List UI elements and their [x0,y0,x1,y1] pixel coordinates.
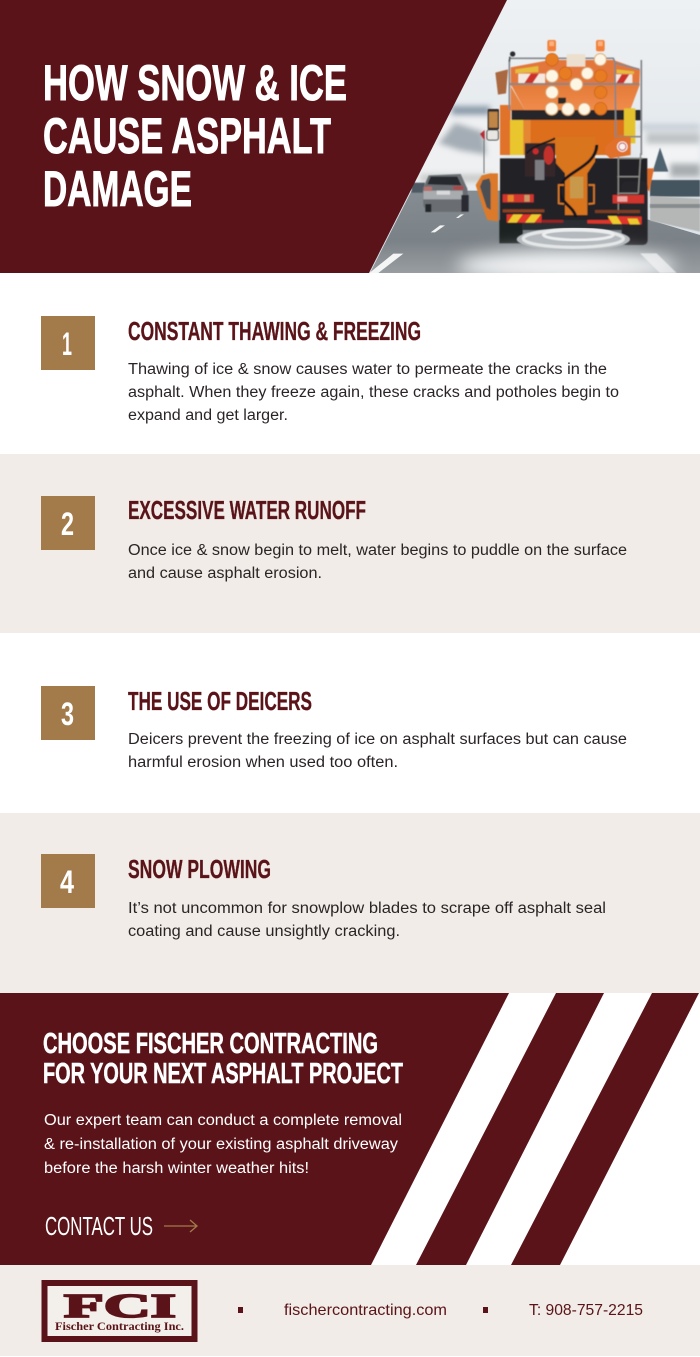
call to action heading [43,1028,403,1090]
number badge 1 [41,316,95,370]
panel: footer [0,1265,700,1356]
truck upper: coordinates from top crop [480,40,642,155]
car [423,174,469,212]
body text 1 [128,361,619,424]
title [43,55,347,217]
right mudflap [642,168,654,192]
yellow panels [510,120,524,155]
white lights [545,54,606,115]
header maroon banner [0,0,507,273]
logo: Fischer Contracting Inc.: Fischer Contracting Inc. [55,1319,184,1333]
bullet [238,1307,243,1313]
panel: call to action [0,993,700,1265]
phone: T: 908-757-2215 [529,1302,643,1319]
pole [482,140,485,173]
orange lights [546,53,607,115]
body text 1: asphalt. When they freeze again, these cracks and potholes begin to [128,384,619,401]
hazard chevrons [518,74,545,83]
body text 3: harmful erosion when used too often. [128,754,398,771]
diagonal stripe 1 [416,993,604,1265]
arrow [164,1220,197,1232]
body text 1: expand and get larger. [128,407,288,424]
call to action heading: CHOOSE FISCHER CONTRACTING [43,1028,378,1060]
call to action text [44,1112,402,1177]
logo: Fischer Contracting Inc. [44,1283,194,1339]
heading 4: SNOW PLOWING [128,854,271,884]
number badge 2: 2 [61,506,74,542]
tail lights [503,194,534,202]
light frame [509,58,641,155]
body text 2 [128,542,627,582]
panel: step 2 excessive water runoff [0,454,700,633]
pump [556,137,595,215]
hopper funnel [511,84,640,111]
cab side [500,105,511,155]
number badge 3: 3 [61,696,74,732]
left arm [476,173,498,221]
title: DAMAGE [43,161,192,217]
call to action text: & re-installation of your existing asphalt driveway [44,1136,398,1153]
hopper upper [511,60,640,86]
call to action heading: FOR YOUR NEXT ASPHALT PROJECT [43,1058,403,1090]
heading 1: CONSTANT THAWING & FREEZING [128,316,421,346]
rub strip [503,209,544,212]
chassis [500,158,647,222]
heading 2: EXCESSIVE WATER RUNOFF [128,495,366,525]
body text 1: Thawing of ice & snow causes water to permeate the cracks in the [128,361,607,378]
body text 3: Deicers prevent the freezing of ice on asphalt surfaces but can cause [128,731,627,748]
yellow trim [515,66,538,73]
number badge 4: 4 [60,864,74,900]
sign plate [605,137,631,158]
bumper [507,214,542,223]
steps [617,153,643,213]
wheels [499,220,523,243]
center orange [524,120,624,155]
title: CAUSE ASPHALT [43,108,331,164]
distant tree [653,148,668,172]
heading 3: THE USE OF DEICERS [128,686,312,716]
logo: Fischer Contracting Inc.: FCI [64,1288,176,1325]
panel: step 4 snow plowing [0,813,700,993]
lane markings [369,254,403,273]
hoses [560,145,597,217]
body text 2: and cause asphalt erosion. [128,565,322,582]
body text 4: coating and cause unsightly cracking. [128,923,400,940]
contact us link: CONTACT US [45,1211,153,1241]
panel: step 3 the use of deicers [0,633,700,813]
road surface [370,191,700,273]
body text 4: It’s not uncommon for snowplow blades to scrape off asphalt seal [128,900,606,917]
beacons [547,40,556,51]
body text 4 [128,900,606,940]
body text 2: Once ice & snow begin to melt, water begins to puddle on the surface [128,542,627,559]
call to action text: before the harsh winter weather hits! [44,1160,309,1177]
title: HOW SNOW & ICE [43,55,347,111]
website: fischercontracting.com [284,1302,447,1319]
black crossbar [512,110,642,120]
number badge 4 [41,854,95,908]
bullet [483,1307,488,1313]
photo: snow plow truck on highway [340,0,700,282]
panel: step 1 constant thawing and freezing [0,273,700,454]
maroon banner with diagonal edge [0,993,509,1265]
truck lower: coordinates from lower crop [476,137,654,245]
salt spray [457,228,677,282]
diagonal stripe 2 [511,993,699,1265]
number badge 2 [41,496,95,550]
mirror [488,109,499,130]
call to action text: Our expert team can conduct a complete removal [44,1112,402,1129]
body text 3 [128,731,627,771]
number badge 3 [41,686,95,740]
number badge 1: 1 [62,326,72,362]
